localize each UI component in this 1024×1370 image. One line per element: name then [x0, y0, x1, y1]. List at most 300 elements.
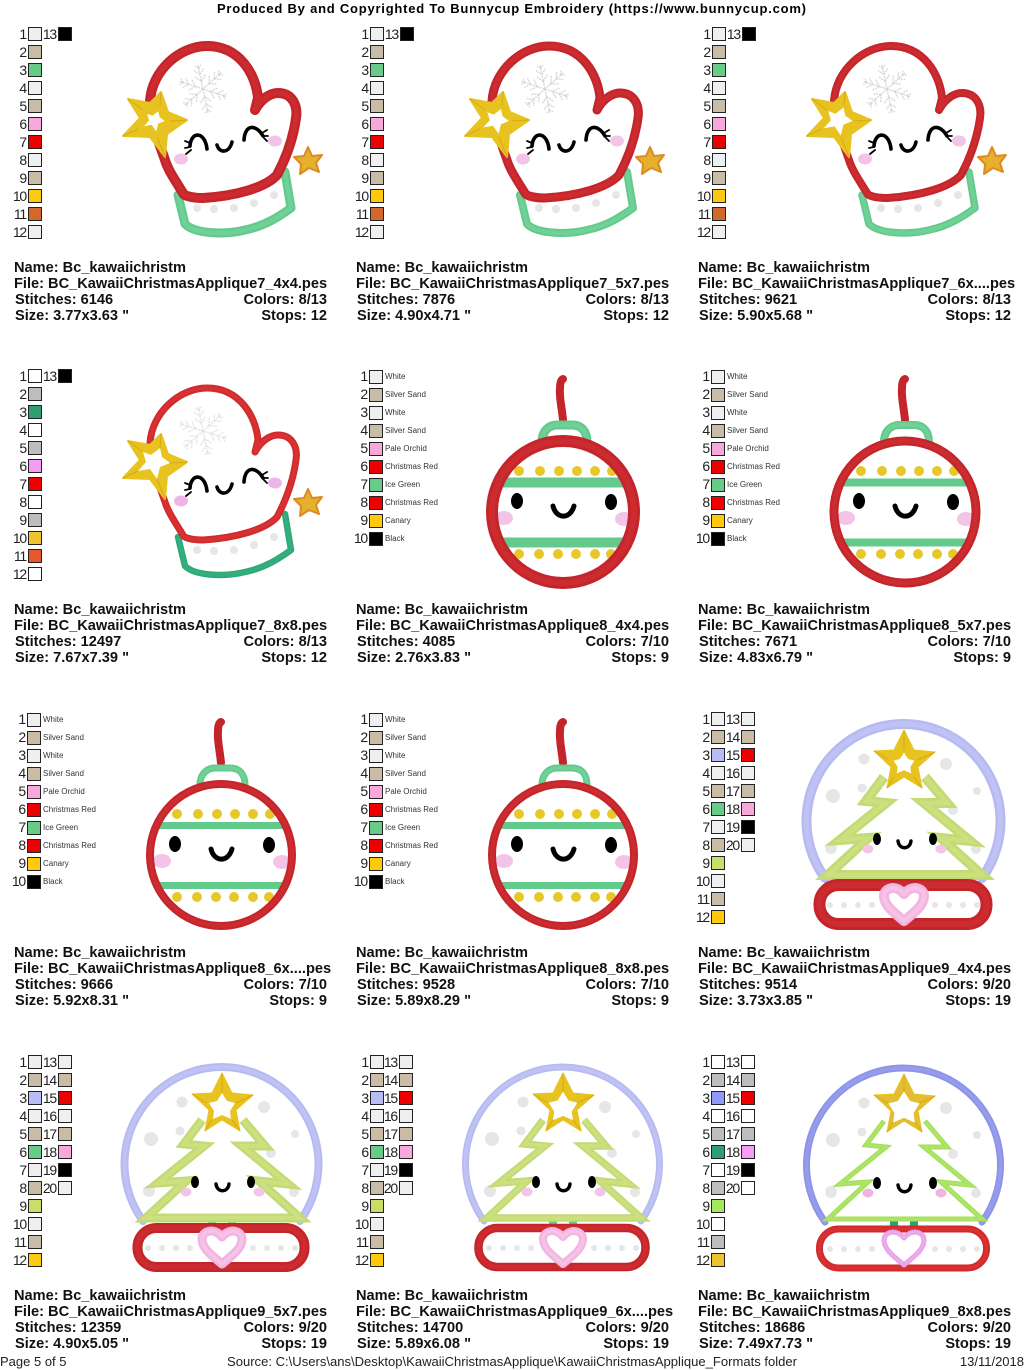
colour legend: 20 — [726, 837, 740, 853]
design details: Stops: 9 — [611, 650, 669, 666]
design details: Colors: 8/13 — [243, 292, 327, 308]
colour legend: 7 — [702, 819, 710, 835]
design details — [14, 602, 327, 666]
colour legend: 5 — [361, 98, 369, 114]
colour legend: 5 — [360, 440, 368, 456]
colour legend: 6 — [18, 801, 26, 817]
design details — [698, 602, 1011, 666]
colour legend: Christmas Red — [43, 841, 96, 850]
colour legend: 16 — [384, 1108, 398, 1124]
colour legend: Ice Green — [727, 480, 762, 489]
colour legend: 12 — [355, 224, 369, 240]
colour legend: Christmas Red — [385, 462, 438, 471]
design card: ornament 5x7 — [696, 368, 1011, 666]
design details: Name: Bc_kawaiichristm — [14, 1288, 186, 1304]
colour legend: 16 — [726, 1108, 740, 1124]
colour legend: 2 — [360, 386, 368, 402]
colour legend: Ice Green — [385, 823, 420, 832]
design details: Size: 3.73x3.85 " — [699, 993, 813, 1009]
colour legend: 7 — [19, 476, 27, 492]
design details: Stops: 19 — [261, 1336, 327, 1352]
colour legend: 12 — [13, 566, 27, 582]
design details: Stitches: 7671 — [699, 634, 797, 650]
design card: snow globe 8x8 — [696, 1054, 1011, 1352]
colour legend: 11 — [697, 891, 710, 907]
design details: Colors: 9/20 — [585, 1320, 669, 1336]
colour legend: 4 — [702, 1108, 710, 1124]
design details: Size: 2.76x3.83 " — [357, 650, 471, 666]
colour legend: 4 — [19, 1108, 27, 1124]
colour legend: 8 — [360, 494, 368, 510]
design details: File: BC_KawaiiChristmasApplique7_6x....pes — [698, 276, 1015, 292]
design details: Name: Bc_kawaiichristm — [698, 260, 870, 276]
design details — [698, 260, 1015, 324]
colour legend: 6 — [703, 116, 711, 132]
colour legend: Black — [385, 877, 406, 886]
colour legend: 19 — [384, 1162, 398, 1178]
design details: Stops: 12 — [603, 308, 669, 324]
colour legend: 19 — [726, 1162, 740, 1178]
design details: Size: 4.90x4.71 " — [357, 308, 471, 324]
design details: Name: Bc_kawaiichristm — [14, 945, 186, 961]
colour legend: 20 — [384, 1180, 398, 1196]
colour legend: 4 — [360, 765, 368, 781]
icon: ornament — [492, 379, 634, 583]
colour legend: Christmas Red — [727, 498, 780, 507]
colour legend: 2 — [19, 44, 27, 60]
colour legend: 2 — [702, 386, 710, 402]
colour legend: 3 — [702, 404, 710, 420]
colour legend: 7 — [360, 819, 368, 835]
design details — [356, 1288, 673, 1352]
colour legend: 3 — [703, 62, 711, 78]
design details: Name: Bc_kawaiichristm — [356, 945, 528, 961]
design details: File: BC_KawaiiChristmasApplique7_8x8.pes — [14, 618, 327, 634]
design details: Name: Bc_kawaiichristm — [356, 1288, 528, 1304]
colour legend: Silver Sand — [385, 426, 426, 435]
colour legend: 2 — [702, 1072, 710, 1088]
colour legend: 8 — [19, 494, 27, 510]
colour legend: 3 — [361, 1090, 369, 1106]
design details: File: BC_KawaiiChristmasApplique9_6x....pes — [356, 1304, 673, 1320]
colour legend: 17 — [726, 1126, 740, 1142]
colour legend: 9 — [702, 1198, 710, 1214]
colour legend: 18 — [726, 1144, 740, 1160]
colour legend: 4 — [702, 422, 710, 438]
colour legend: 1 — [702, 368, 710, 384]
icon: mitten — [123, 46, 322, 233]
colour legend: 6 — [702, 458, 710, 474]
colour legend: 6 — [360, 458, 368, 474]
colour legend: 13 — [726, 711, 740, 727]
colour legend: 2 — [702, 729, 710, 745]
design details: File: BC_KawaiiChristmasApplique8_8x8.pes — [356, 961, 669, 977]
colour legend: Christmas Red — [385, 805, 438, 814]
design details: Stops: 19 — [945, 1336, 1011, 1352]
colour legend: 16 — [726, 765, 740, 781]
colour legend: 3 — [361, 62, 369, 78]
design details: File: BC_KawaiiChristmasApplique9_5x7.pes — [14, 1304, 327, 1320]
colour legend: 5 — [702, 440, 710, 456]
colour legend: Silver Sand — [43, 733, 84, 742]
colour legend: 7 — [18, 819, 26, 835]
colour legend: Silver Sand — [727, 426, 768, 435]
colour legend: Silver Sand — [385, 733, 426, 742]
colour legend: 9 — [19, 170, 27, 186]
design details: Stitches: 4085 — [357, 634, 455, 650]
colour legend: 3 — [702, 747, 710, 763]
colour legend: 10 — [354, 530, 368, 546]
colour legend: 12 — [697, 224, 711, 240]
footer: source path: Source: C:\Users\ans\Desktop\KawaiiChristmasApplique\KawaiiChristmasApplique_Formats folder — [227, 1354, 798, 1369]
colour legend: 15 — [384, 1090, 398, 1106]
colour legend: 7 — [702, 476, 710, 492]
colour legend: 11 — [356, 1234, 369, 1250]
design card: ornament 8x8 — [354, 711, 669, 1009]
design details: Stops: 9 — [953, 650, 1011, 666]
design details: Name: Bc_kawaiichristm — [698, 1288, 870, 1304]
design details — [356, 260, 669, 324]
design details — [14, 1288, 327, 1352]
colour legend: 8 — [361, 152, 369, 168]
colour legend: 19 — [726, 819, 740, 835]
design details: Name: Bc_kawaiichristm — [356, 602, 528, 618]
design details: Colors: 8/13 — [243, 634, 327, 650]
design details: Size: 5.90x5.68 " — [699, 308, 813, 324]
colour legend: 3 — [360, 404, 368, 420]
colour legend: 9 — [360, 855, 368, 871]
design details: Size: 5.89x8.29 " — [357, 993, 471, 1009]
design card: mitten 5x7 — [355, 26, 669, 324]
icon: snow globe — [124, 1067, 318, 1267]
colour legend: 14 — [384, 1072, 398, 1088]
colour legend: 13 — [385, 26, 399, 42]
colour legend: 4 — [19, 422, 27, 438]
colour legend: 17 — [726, 783, 740, 799]
colour legend: 6 — [19, 116, 27, 132]
design details: Stitches: 9666 — [15, 977, 113, 993]
colour legend: 12 — [13, 224, 27, 240]
colour legend: 8 — [702, 1180, 710, 1196]
colour legend: 7 — [361, 1162, 369, 1178]
colour legend: 8 — [702, 494, 710, 510]
colour legend: Ice Green — [385, 480, 420, 489]
colour legend: 10 — [355, 1216, 369, 1232]
design card: snow globe 5x7 — [13, 1054, 327, 1352]
icon: ornament — [492, 722, 634, 926]
design details — [698, 945, 1011, 1009]
colour legend: 4 — [702, 765, 710, 781]
design details — [14, 945, 331, 1009]
colour legend: 9 — [19, 512, 27, 528]
colour legend: 8 — [19, 1180, 27, 1196]
colour legend: Christmas Red — [385, 498, 438, 507]
icon: ornament — [834, 379, 976, 583]
colour legend: White — [385, 408, 406, 417]
colour legend: 5 — [18, 783, 26, 799]
colour legend: Silver Sand — [43, 769, 84, 778]
design details: File: BC_KawaiiChristmasApplique8_6x....pes — [14, 961, 331, 977]
colour legend: Silver Sand — [727, 390, 768, 399]
colour legend — [355, 1054, 412, 1268]
design details: Stitches: 7876 — [357, 292, 455, 308]
design details: Stitches: 18686 — [699, 1320, 805, 1336]
design details: File: BC_KawaiiChristmasApplique8_5x7.pes — [698, 618, 1011, 634]
colour legend: 18 — [43, 1144, 57, 1160]
colour legend — [355, 26, 414, 240]
colour legend: Canary — [385, 859, 411, 868]
colour legend: Canary — [43, 859, 69, 868]
design details: Stitches: 9514 — [699, 977, 798, 993]
colour legend: 2 — [361, 44, 369, 60]
colour legend: 4 — [703, 80, 711, 96]
design details: Stitches: 9621 — [699, 292, 797, 308]
colour legend: 10 — [696, 530, 710, 546]
colour legend: 10 — [13, 1216, 27, 1232]
colour legend: 12 — [13, 1252, 27, 1268]
colour legend: 10 — [12, 873, 26, 889]
colour legend: 7 — [703, 134, 711, 150]
design card: snow globe 6x10 — [355, 1054, 673, 1352]
colour legend: 4 — [18, 765, 26, 781]
colour legend: 8 — [18, 837, 26, 853]
colour legend: 10 — [697, 188, 711, 204]
colour legend: 14 — [43, 1072, 57, 1088]
colour legend — [696, 1054, 754, 1268]
colour legend: 13 — [727, 26, 741, 42]
design details: Stitches: 14700 — [357, 1320, 463, 1336]
colour legend: 15 — [726, 747, 740, 763]
colour legend: 1 — [18, 711, 26, 727]
design details: Colors: 7/10 — [585, 634, 669, 650]
colour legend: 4 — [361, 80, 369, 96]
colour legend: 6 — [361, 1144, 369, 1160]
colour legend — [12, 711, 96, 889]
design details: Colors: 7/10 — [585, 977, 669, 993]
design details: Name: Bc_kawaiichristm — [14, 602, 186, 618]
colour legend: 1 — [19, 26, 27, 42]
colour legend: 12 — [355, 1252, 369, 1268]
icon: mitten — [807, 46, 1006, 233]
design details: Colors: 9/20 — [927, 1320, 1011, 1336]
colour legend: 11 — [14, 1234, 27, 1250]
colour legend: 8 — [702, 837, 710, 853]
colour legend: White — [385, 372, 406, 381]
colour legend: Christmas Red — [43, 805, 96, 814]
colour legend: 5 — [19, 1126, 27, 1142]
colour legend: 3 — [18, 747, 26, 763]
colour legend: White — [385, 715, 406, 724]
design details — [698, 1288, 1011, 1352]
colour legend: 14 — [726, 729, 740, 745]
colour legend — [13, 26, 72, 240]
colour legend: 2 — [360, 729, 368, 745]
colour legend: 10 — [13, 530, 27, 546]
design details: Colors: 7/10 — [927, 634, 1011, 650]
colour legend: Black — [727, 534, 748, 543]
design details — [14, 260, 327, 324]
colour legend: 13 — [43, 1054, 57, 1070]
colour legend: 17 — [384, 1126, 398, 1142]
colour legend: Ice Green — [43, 823, 78, 832]
colour legend: 1 — [361, 1054, 369, 1070]
design details: Colors: 8/13 — [927, 292, 1011, 308]
colour legend: 7 — [19, 134, 27, 150]
colour legend: 17 — [43, 1126, 57, 1142]
colour legend: 6 — [702, 1144, 710, 1160]
colour legend: 10 — [355, 188, 369, 204]
colour legend: 5 — [19, 440, 27, 456]
colour legend: 2 — [19, 386, 27, 402]
footer: page number: Page 5 of 5 — [0, 1354, 66, 1369]
colour legend: 6 — [702, 801, 710, 817]
colour legend: 4 — [19, 80, 27, 96]
colour legend: 9 — [19, 1198, 27, 1214]
design details: Stops: 12 — [261, 308, 327, 324]
design details: Stitches: 12497 — [15, 634, 121, 650]
design details: Colors: 7/10 — [243, 977, 327, 993]
colour legend: Pale Orchid — [727, 444, 769, 453]
colour legend: White — [43, 751, 64, 760]
colour legend: 1 — [703, 26, 711, 42]
design card: mitten 6x10 — [697, 26, 1015, 324]
design card: snow globe 4x4 — [696, 711, 1011, 1009]
colour legend: 8 — [703, 152, 711, 168]
colour legend — [13, 368, 72, 582]
design details: Name: Bc_kawaiichristm — [698, 602, 870, 618]
colour legend: 4 — [361, 1108, 369, 1124]
colour legend: 10 — [696, 873, 710, 889]
colour legend: 12 — [696, 909, 710, 925]
colour legend: White — [727, 372, 748, 381]
colour legend — [697, 26, 756, 240]
colour legend: 5 — [360, 783, 368, 799]
colour legend: 13 — [726, 1054, 740, 1070]
colour legend: 1 — [19, 368, 27, 384]
colour legend: 18 — [726, 801, 740, 817]
design details: Size: 7.67x7.39 " — [15, 650, 129, 666]
colour legend — [354, 368, 438, 546]
design details: File: BC_KawaiiChristmasApplique9_8x8.pes — [698, 1304, 1011, 1320]
colour legend: 15 — [726, 1090, 740, 1106]
colour legend: 3 — [19, 404, 27, 420]
colour legend: 9 — [18, 855, 26, 871]
icon: snow globe — [466, 1067, 660, 1267]
design details: File: BC_KawaiiChristmasApplique9_4x4.pes — [698, 961, 1011, 977]
design details: File: BC_KawaiiChristmasApplique8_4x4.pes — [356, 618, 669, 634]
colour legend: 10 — [354, 873, 368, 889]
colour legend: 7 — [702, 1162, 710, 1178]
colour legend: Silver Sand — [385, 390, 426, 399]
design details: Colors: 9/20 — [243, 1320, 327, 1336]
colour legend: 13 — [43, 368, 57, 384]
colour legend: White — [385, 751, 406, 760]
design details — [356, 602, 669, 666]
colour legend: 5 — [361, 1126, 369, 1142]
colour legend: 18 — [384, 1144, 398, 1160]
design card: ornament 4x4 — [354, 368, 669, 666]
colour legend: 5 — [703, 98, 711, 114]
colour legend: Pale Orchid — [385, 787, 427, 796]
colour legend: Black — [43, 877, 64, 886]
colour legend: Canary — [385, 516, 411, 525]
colour legend: 10 — [696, 1216, 710, 1232]
colour legend: 11 — [697, 1234, 710, 1250]
design details: Size: 3.77x3.63 " — [15, 308, 129, 324]
design details: Name: Bc_kawaiichristm — [14, 260, 186, 276]
icon: mitten — [465, 46, 664, 233]
colour legend: 11 — [698, 206, 711, 222]
colour legend: 15 — [43, 1090, 57, 1106]
colour legend: Pale Orchid — [385, 444, 427, 453]
colour legend: 20 — [43, 1180, 57, 1196]
colour legend — [13, 1054, 72, 1268]
colour legend: Christmas Red — [385, 841, 438, 850]
colour legend: 11 — [14, 548, 27, 564]
design details: Stops: 12 — [945, 308, 1011, 324]
colour legend: 5 — [702, 783, 710, 799]
colour legend: 3 — [702, 1090, 710, 1106]
footer: date: 13/11/2018 — [960, 1354, 1024, 1369]
colour legend: Canary — [727, 516, 753, 525]
design details: Stops: 9 — [269, 993, 327, 1009]
colour legend: 4 — [360, 422, 368, 438]
colour legend: 16 — [43, 1108, 57, 1124]
design card: mitten 4x4 — [13, 26, 327, 324]
colour legend: 7 — [360, 476, 368, 492]
design details: Size: 4.90x5.05 " — [15, 1336, 129, 1352]
design details: Size: 5.92x8.31 " — [15, 993, 129, 1009]
design details: Name: Bc_kawaiichristm — [356, 260, 528, 276]
colour legend: 8 — [360, 837, 368, 853]
page header: Produced By and Copyrighted To Bunnycup Embroidery (https://www.bunnycup.com) — [217, 1, 806, 16]
colour legend: 13 — [384, 1054, 398, 1070]
icon: snow globe — [806, 724, 1000, 924]
colour legend: 2 — [361, 1072, 369, 1088]
colour legend: 13 — [43, 26, 57, 42]
icon: ornament — [150, 722, 292, 926]
colour legend: 5 — [19, 98, 27, 114]
colour legend: 9 — [361, 1198, 369, 1214]
colour legend: 11 — [14, 206, 27, 222]
colour legend: 9 — [360, 512, 368, 528]
design details: Stops: 19 — [945, 993, 1011, 1009]
colour legend: 10 — [13, 188, 27, 204]
colour legend: 6 — [361, 116, 369, 132]
colour legend: 1 — [702, 1054, 710, 1070]
design details: Size: 4.83x6.79 " — [699, 650, 813, 666]
colour legend: 3 — [19, 62, 27, 78]
colour legend: 7 — [19, 1162, 27, 1178]
icon: snow globe — [806, 1068, 1000, 1268]
colour legend: 9 — [361, 170, 369, 186]
colour legend: 5 — [702, 1126, 710, 1142]
design details: Stops: 19 — [603, 1336, 669, 1352]
design details — [356, 945, 669, 1009]
icon: mitten — [123, 388, 322, 575]
design details: Name: Bc_kawaiichristm — [698, 945, 870, 961]
colour legend: 19 — [43, 1162, 57, 1178]
design details: Size: 7.49x7.73 " — [699, 1336, 813, 1352]
design details: Stitches: 6146 — [15, 292, 113, 308]
colour legend: Pale Orchid — [43, 787, 85, 796]
colour legend: 2 — [703, 44, 711, 60]
colour legend: 1 — [360, 711, 368, 727]
colour legend — [696, 711, 754, 925]
colour legend: 9 — [702, 855, 710, 871]
colour legend: 6 — [360, 801, 368, 817]
colour legend: 3 — [19, 1090, 27, 1106]
